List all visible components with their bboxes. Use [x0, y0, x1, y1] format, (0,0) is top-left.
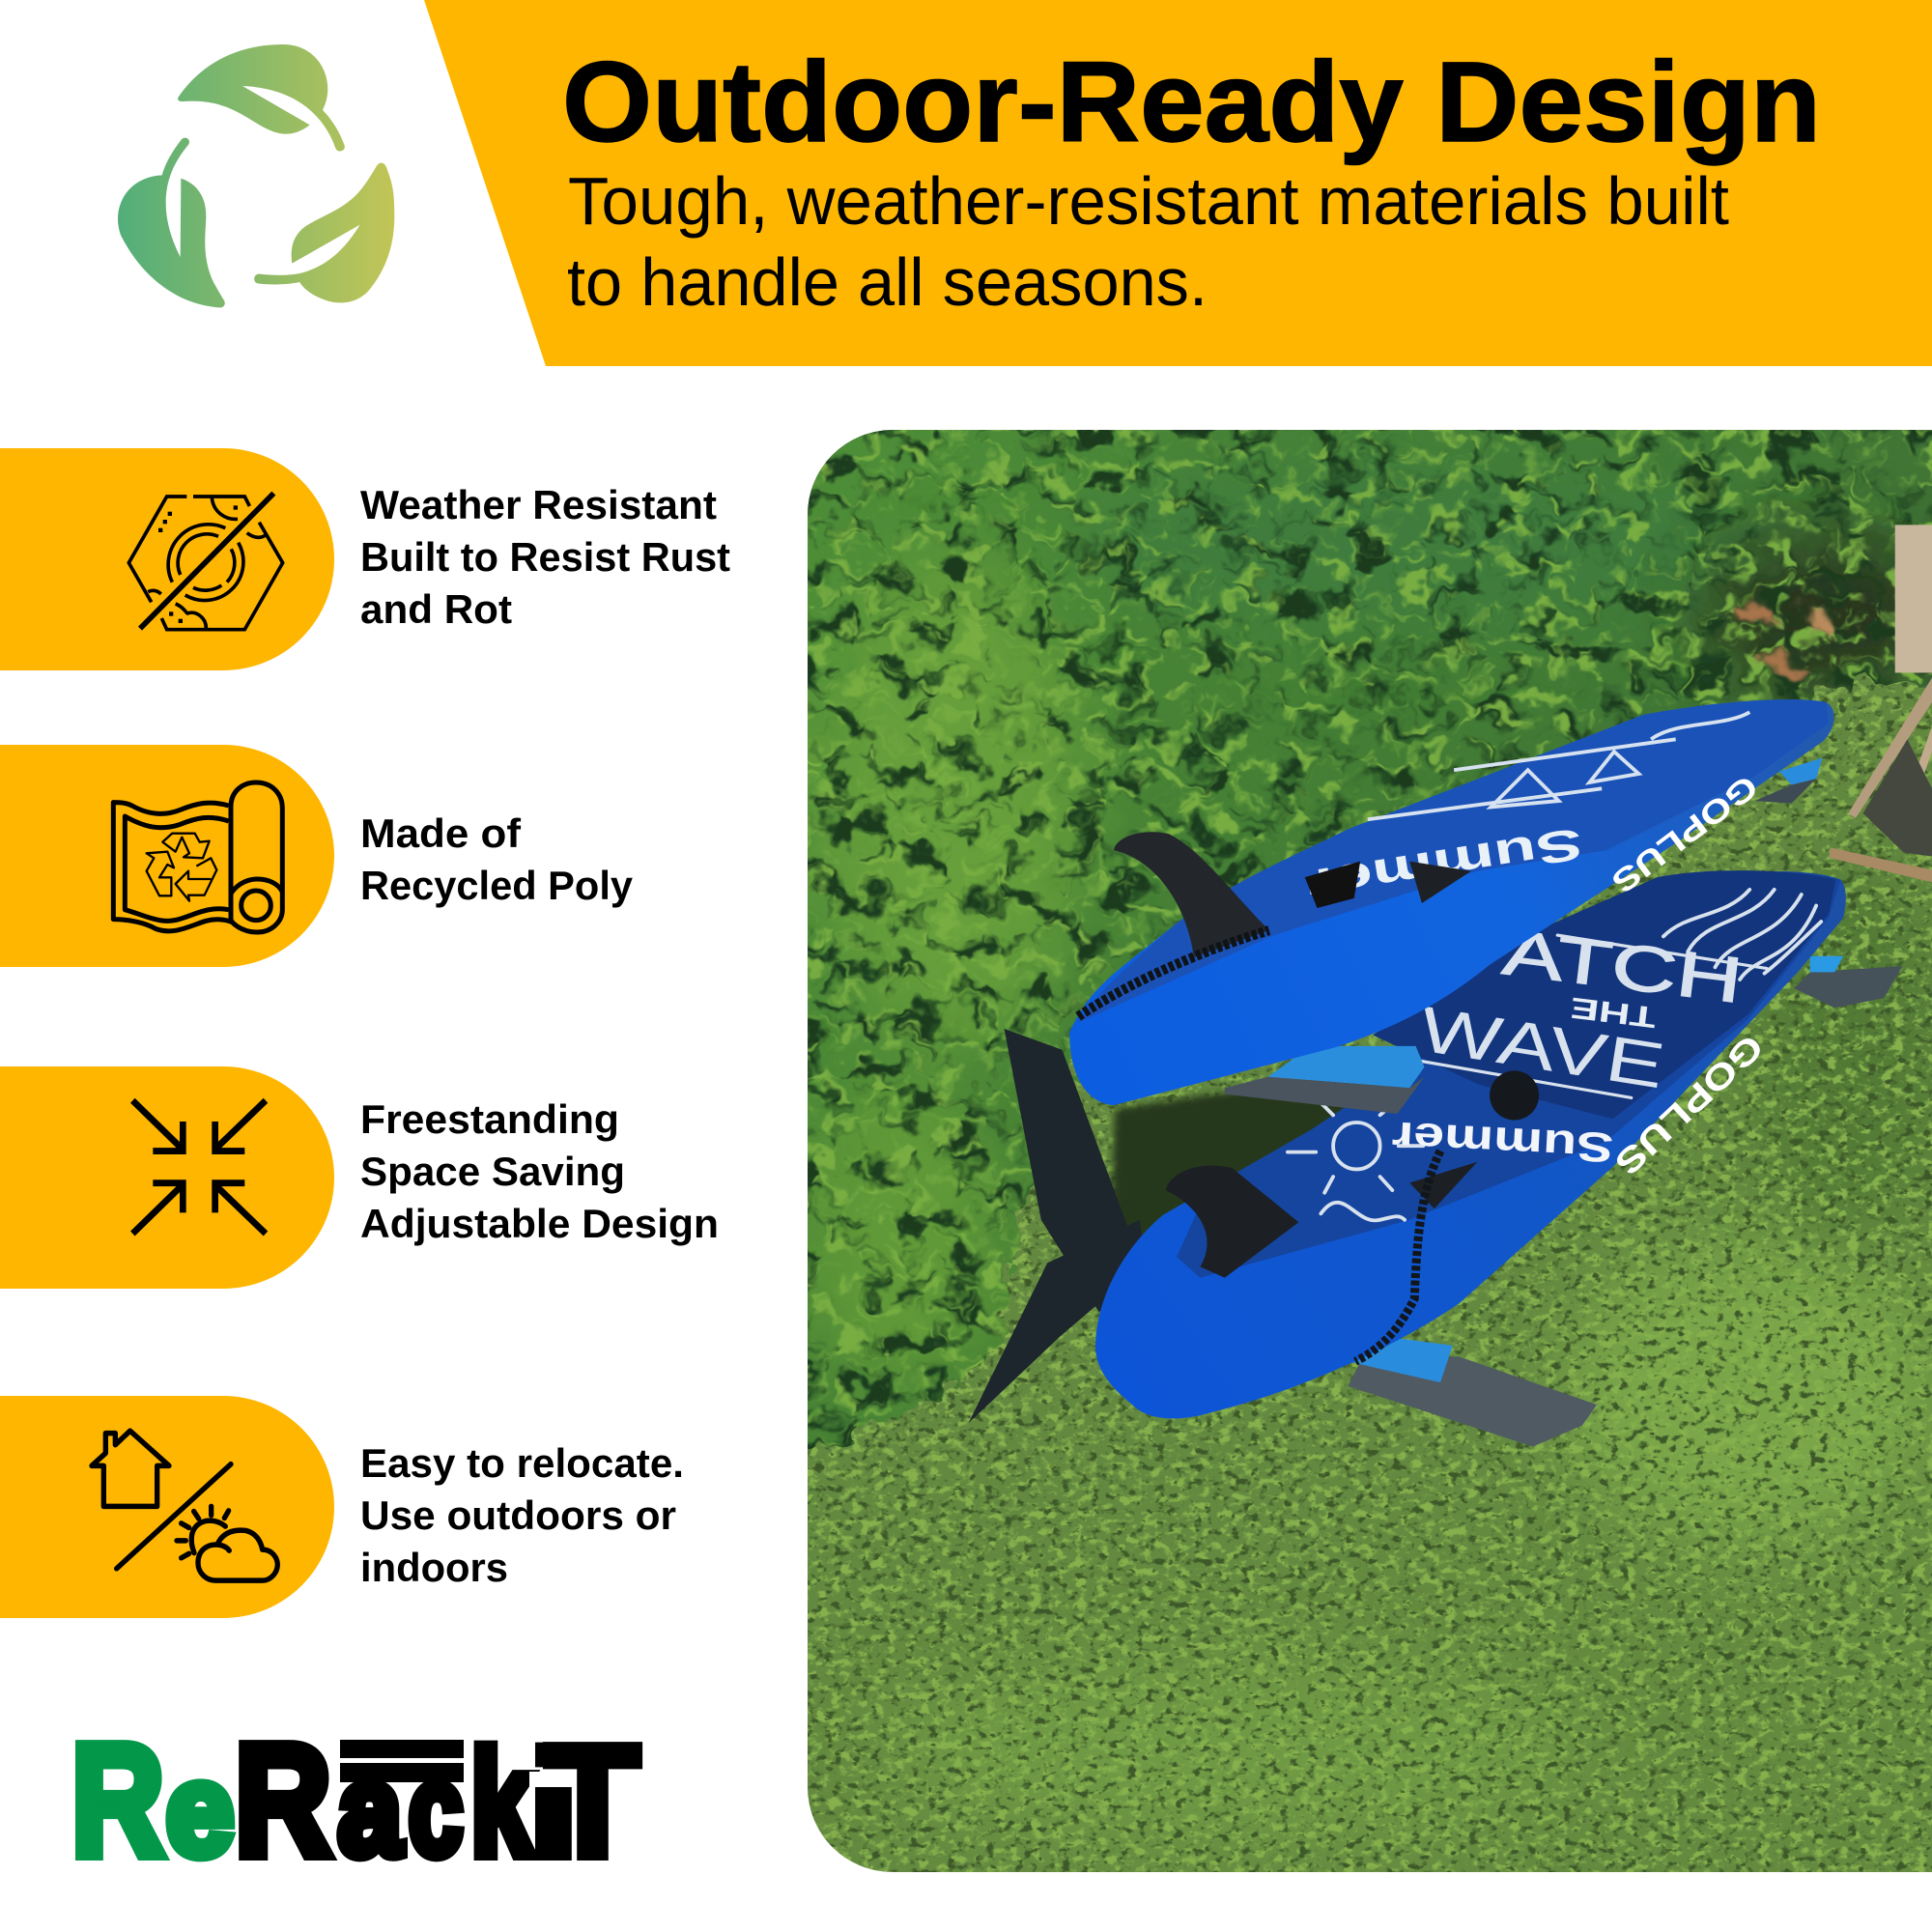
shadow gap between boards: [1107, 1079, 1378, 1236]
lower board: THE: [1569, 991, 1658, 1034]
logo: ReRackiT: k: [470, 1719, 533, 1887]
hedge: [788, 419, 1932, 1479]
label: weather resistant: Weather Resistant: [360, 482, 717, 527]
lower board: [1095, 870, 1846, 1418]
photo: paddle boards on rack: [788, 419, 1932, 1884]
lower board: Summer: [1391, 1112, 1614, 1170]
feature: relocate: [0, 1396, 684, 1618]
rack arms: [1348, 757, 1902, 1446]
logo: ReRackiT: R: [235, 1712, 331, 1889]
logo: ReRackiT: a: [338, 1737, 403, 1883]
title: Outdoor-Ready Design: [562, 39, 1821, 166]
upper board fin and fittings: [1114, 832, 1471, 957]
icon: rust-free hexagon: [128, 494, 283, 630]
label: freestanding: Adjustable Design: [360, 1201, 719, 1246]
upper leash: [1078, 930, 1269, 1016]
label: relocate: Easy to relocate.: [360, 1440, 684, 1486]
grass: [801, 430, 1932, 1884]
label: freestanding: Space Saving: [360, 1149, 625, 1194]
label: relocate: Use outdoors or: [360, 1492, 676, 1538]
label: weather resistant: Built to Resist Rust: [360, 534, 730, 580]
label: recycled poly: Recycled Poly: [360, 863, 634, 908]
label: weather resistant: and Rot: [360, 586, 512, 632]
foot pad between boards: [1225, 1046, 1424, 1114]
logo: ReRackiT: [71, 1712, 639, 1889]
label: freestanding: [360, 1096, 719, 1246]
label: relocate: [360, 1440, 684, 1590]
feature: weather resistant: [0, 448, 730, 670]
label: recycled poly: [360, 810, 634, 908]
upper board: [1069, 699, 1834, 1105]
feature: recycled poly: [0, 745, 634, 967]
subtitle: Tough, weather-resistant materials built: [568, 163, 1729, 239]
feature: freestanding: [0, 1066, 719, 1289]
logo: ReRackiT: c: [409, 1737, 463, 1883]
label: weather resistant: [360, 482, 730, 632]
lower board: ATCH: [1499, 917, 1747, 1017]
fitting on lower board: [1490, 1070, 1539, 1120]
icon: inward arrows: [132, 1100, 266, 1234]
lower board graphics: [1288, 890, 1821, 1220]
pill 2: [0, 745, 334, 967]
logo: ReRackiT: T: [546, 1713, 639, 1889]
icon: recycling leaves: [118, 44, 394, 307]
pill 3: [0, 1066, 334, 1289]
lower board: GOPLUS: [1607, 1027, 1771, 1183]
label: freestanding: Freestanding: [360, 1096, 619, 1142]
lower board fin and footpad: [1166, 1162, 1477, 1278]
pill 1: [0, 448, 334, 670]
logo: ReRackiT: i: [528, 1720, 579, 1888]
pill 4: [0, 1396, 334, 1618]
upper board: GOPLUS: [1605, 768, 1764, 900]
subtitle: to handle all seasons.: [567, 244, 1208, 320]
icon: recycled sheet roll: [113, 782, 282, 932]
subtitle: [567, 163, 1729, 320]
header banner: [424, 0, 1932, 366]
upper board graphics: [1368, 712, 1749, 819]
label: relocate: indoors: [360, 1545, 508, 1590]
icon: house and weather: [92, 1431, 277, 1580]
logo: ReRackiT: e: [166, 1737, 234, 1883]
rack: left posts: [969, 1029, 1146, 1423]
logo: ReRackiT: R: [71, 1712, 164, 1889]
background props: [1829, 525, 1932, 882]
lower leash: [1355, 1151, 1440, 1361]
label: recycled poly: Made of: [360, 810, 522, 856]
upper board: Summer: [1304, 818, 1586, 912]
lower board: WAVE: [1414, 993, 1669, 1102]
